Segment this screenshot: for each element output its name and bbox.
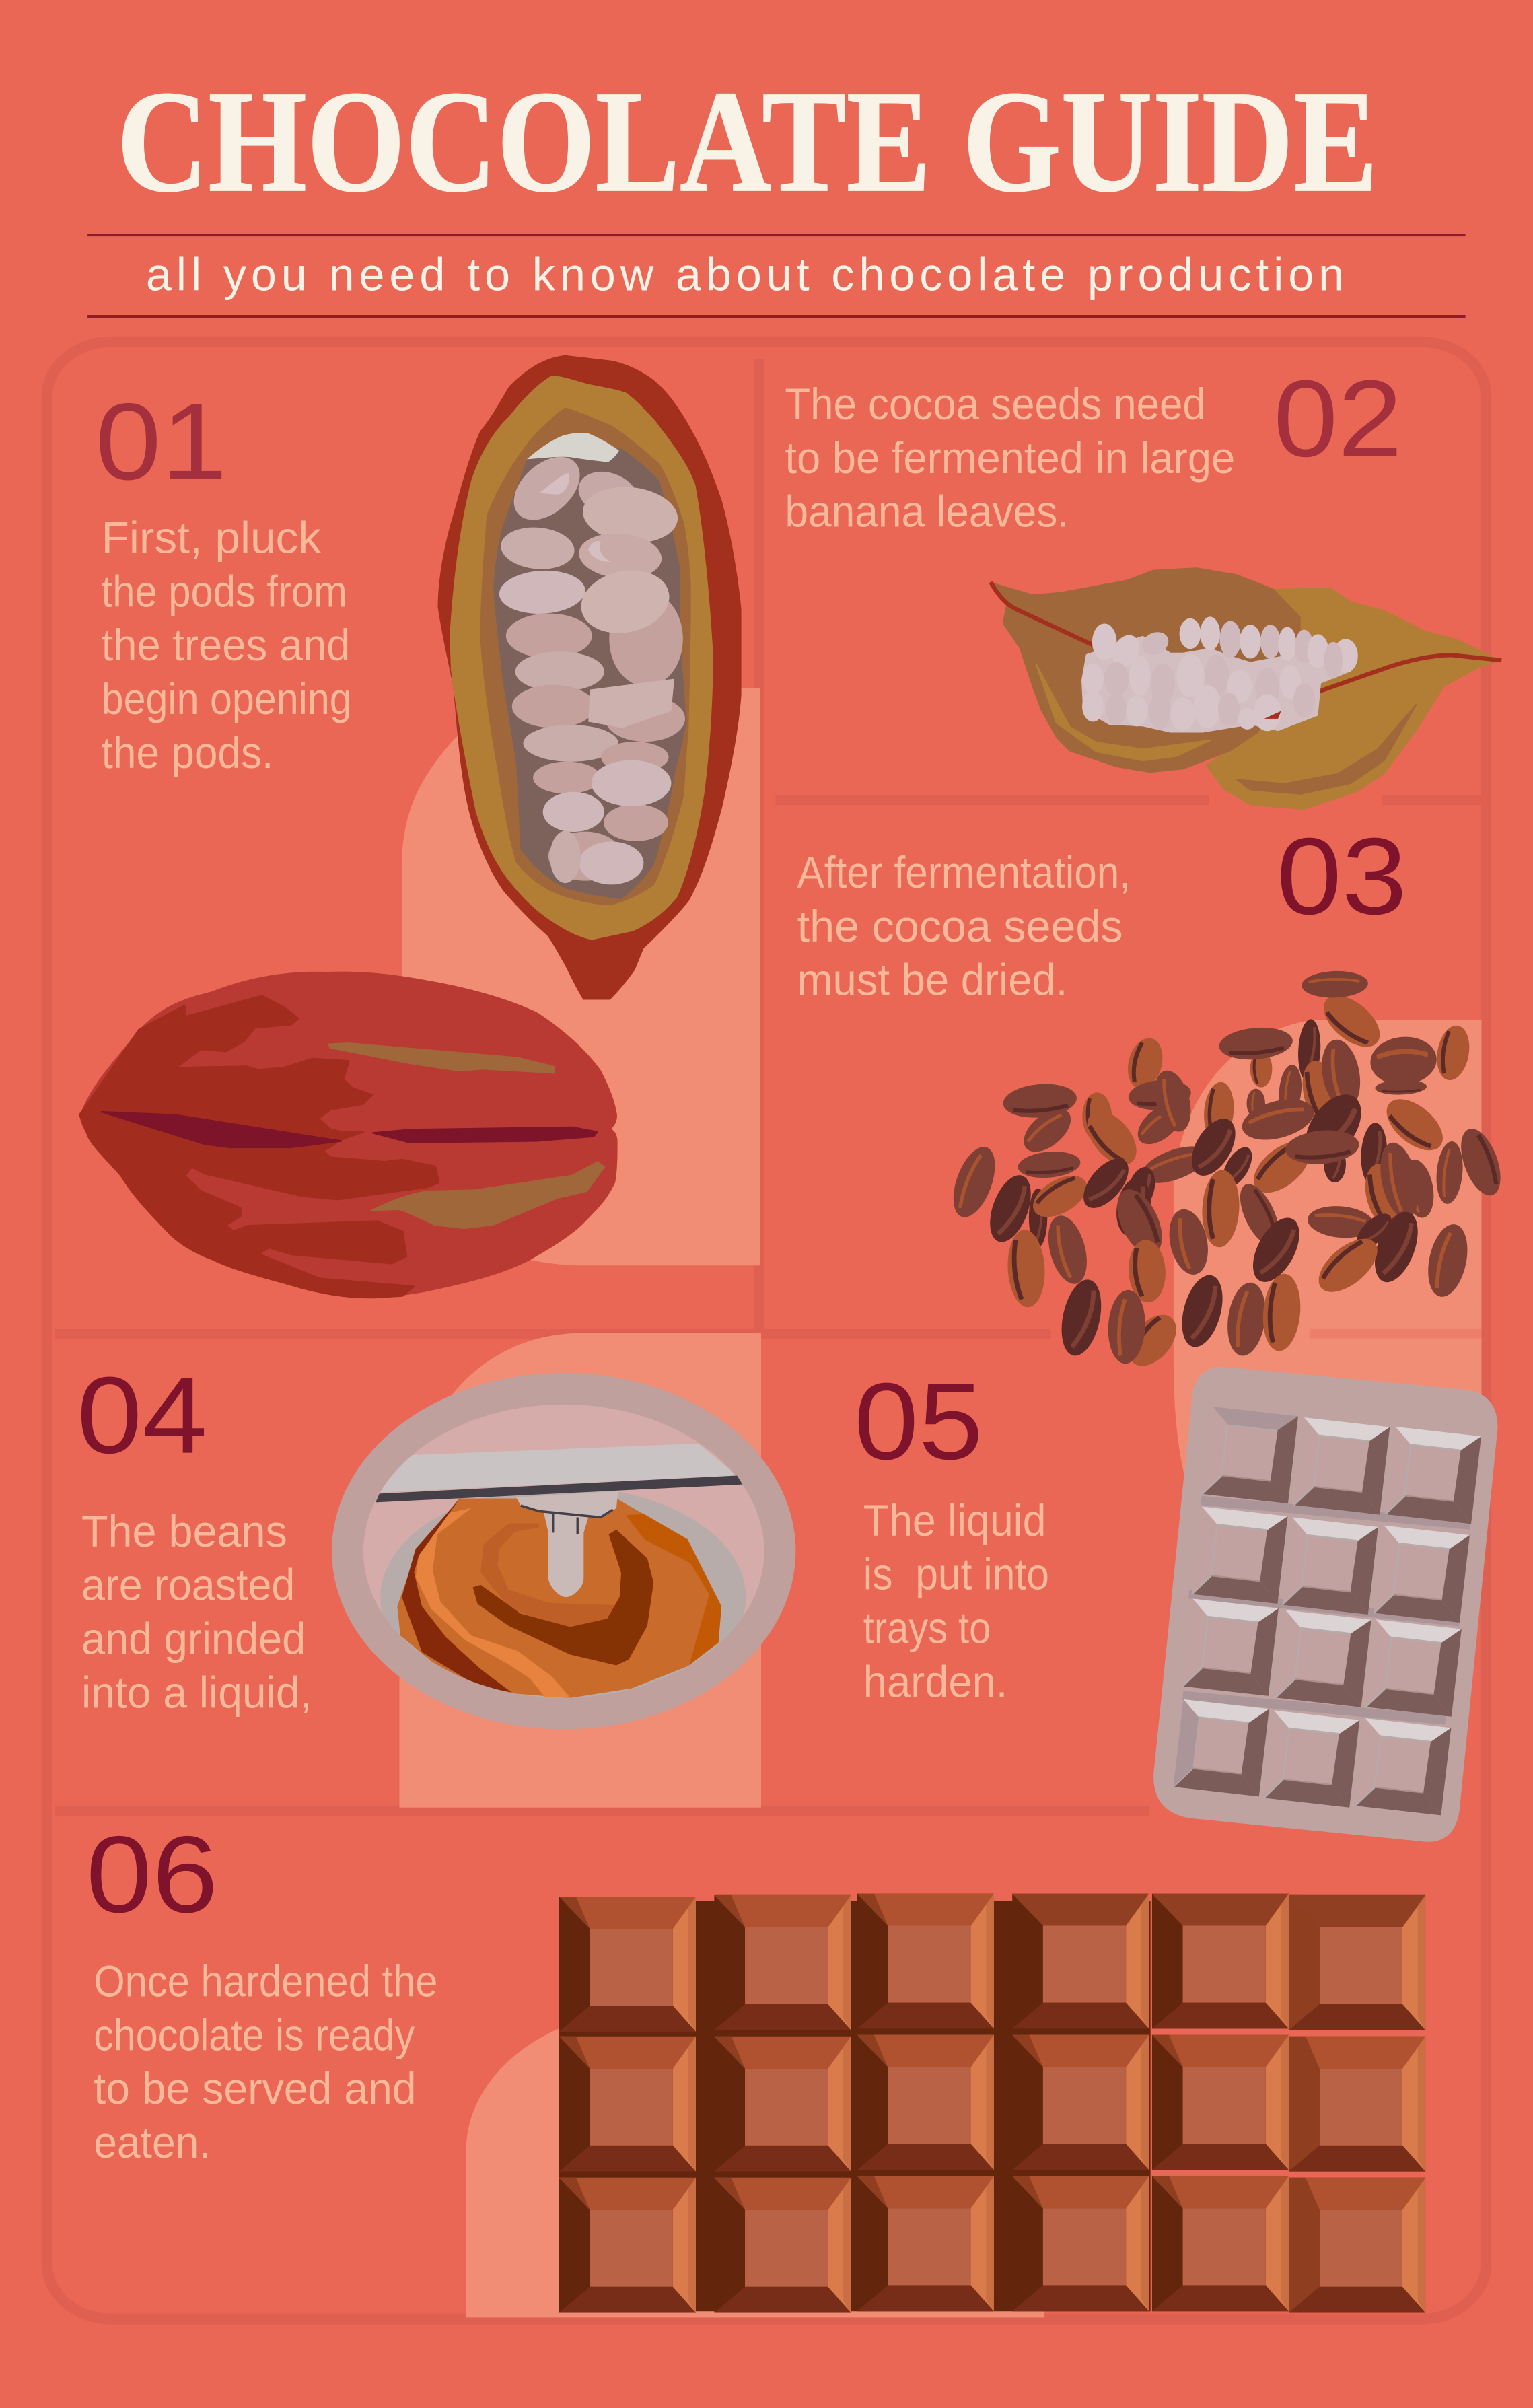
- icon: chocolate bar: [559, 1894, 1425, 2313]
- step 01: begin opening: [102, 674, 352, 724]
- panel: peach backdrop step 1: [402, 688, 760, 1265]
- step 01: the trees and: [102, 621, 350, 670]
- step 06: eaten.: [94, 2118, 211, 2168]
- step 04: The beans: [81, 1507, 287, 1557]
- icon: opened cacao pod: [438, 355, 742, 1000]
- step 05: harden.: [863, 1657, 1007, 1707]
- step 02: The cocoa seeds need: [785, 380, 1206, 429]
- step 03: must be dried.: [797, 956, 1067, 1005]
- step 05: [854, 1361, 1049, 1707]
- step 06: chocolate is ready: [94, 2010, 415, 2060]
- step 05: 05: [854, 1361, 983, 1483]
- panel: peach backdrop step 6: [466, 2027, 1044, 2317]
- title: CHOCOLATE GUIDE: [116, 61, 1378, 222]
- step 02: to be fermented in large: [785, 433, 1235, 483]
- step 06: 06: [86, 1814, 218, 1936]
- panel: rounded outer frame: [47, 342, 1486, 2319]
- step 06: to be served and: [94, 2064, 417, 2114]
- step 01: [96, 381, 352, 778]
- step 01: the pods from: [102, 567, 347, 616]
- step 02: 02: [1273, 358, 1402, 480]
- step 04: into a liquid,: [81, 1668, 312, 1718]
- step 03: [797, 816, 1407, 1005]
- icon: pile of dried cocoa beans: [945, 970, 1508, 1375]
- icon: chocolate mould tray: [1153, 1367, 1498, 1842]
- subtitle with rules: all you need to know about chocolate production: [146, 248, 1344, 300]
- icon: fermenting seeds on banana leaves: [991, 567, 1501, 810]
- step 01: the pods.: [102, 728, 273, 778]
- step 03: After fermentation,: [797, 848, 1131, 898]
- panel: peach backdrop step 4: [399, 1333, 761, 1808]
- step 03: the cocoa seeds: [797, 902, 1123, 952]
- step 01: 01: [96, 381, 227, 503]
- step 04: [77, 1355, 312, 1718]
- icon: grinding bowl with melted chocolate: [332, 1373, 795, 1729]
- step 03: 03: [1277, 816, 1407, 937]
- step 01: First, pluck: [102, 513, 322, 563]
- step 04: 04: [77, 1355, 207, 1477]
- step 06: Once hardened the: [94, 1956, 438, 2006]
- step 05: trays to: [863, 1604, 991, 1654]
- panel: peach backdrop step 3: [1174, 1020, 1482, 1482]
- step 04: and grinded: [81, 1615, 306, 1664]
- step 06: [86, 1814, 438, 2168]
- step 04: are roasted: [81, 1561, 295, 1610]
- step 05: is put into: [863, 1550, 1049, 1600]
- icon: whole cacao pod: [80, 972, 618, 1298]
- step 02: banana leaves.: [785, 487, 1069, 537]
- step 02: [785, 358, 1402, 537]
- step 05: The liquid: [863, 1496, 1046, 1546]
